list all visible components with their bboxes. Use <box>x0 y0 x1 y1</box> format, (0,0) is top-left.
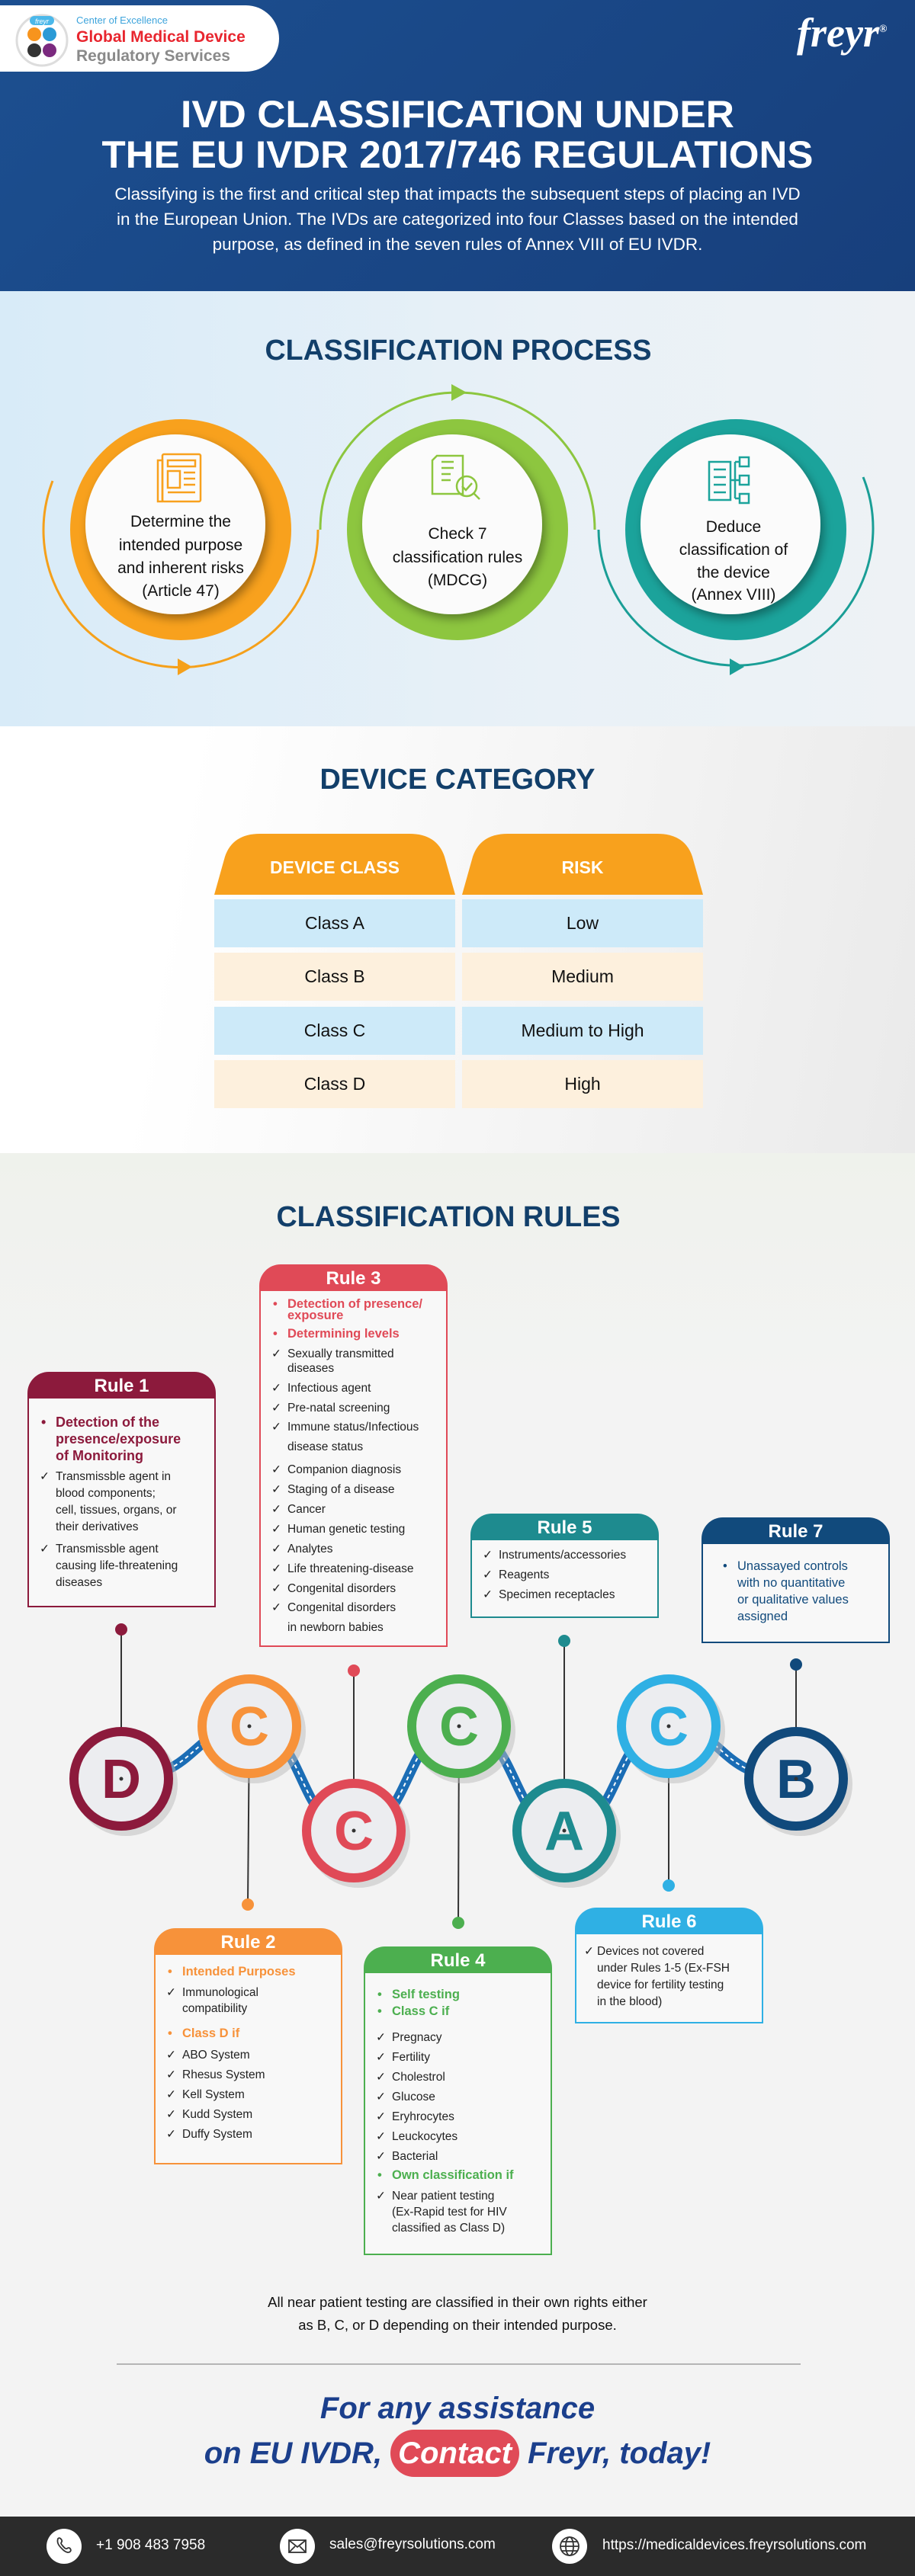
rule 7 box: or qualitative values <box>737 1593 849 1607</box>
rule 7 box: with no quantitative <box>737 1576 845 1590</box>
step 3 circle <box>625 419 846 640</box>
text: step 3: the device <box>697 564 770 582</box>
rule 2 box: Intended Purposes <box>182 1965 296 1978</box>
table: Class C <box>304 1020 365 1040</box>
icon: document check <box>432 456 480 499</box>
panel: device category <box>0 726 915 1153</box>
circle C red: C <box>334 1801 374 1862</box>
rule 5 box: Specimen receptacles <box>499 1588 615 1601</box>
logo emblem: freyr <box>35 18 50 25</box>
circle A: A <box>544 1801 584 1862</box>
text: step 1: and inherent risks <box>117 559 244 577</box>
circle B <box>749 1732 852 1836</box>
table rows: Class A <box>305 913 364 933</box>
heading: classification process: CLASSIFICATION PROCESS <box>265 335 651 367</box>
rule 4 box: Self testing <box>392 1988 460 2001</box>
table: Class D <box>304 1074 365 1094</box>
rule 4 box: Bacterial <box>392 2150 438 2163</box>
rule 3 box <box>259 1264 448 1647</box>
title <box>102 93 813 175</box>
rule 3 box: Human genetic testing <box>287 1523 405 1536</box>
rule 3 box: Congenital disorders <box>287 1601 396 1614</box>
rule 5 box: Instruments/accessories <box>499 1549 626 1562</box>
logo pill <box>0 5 279 72</box>
rule 2 box: ABO System <box>182 2049 250 2062</box>
table: High <box>564 1074 601 1094</box>
table: Low <box>567 913 599 933</box>
circle C blue: C <box>649 1697 689 1757</box>
rule 3 box: Analytes <box>287 1543 332 1556</box>
rule 1 box: Transmissble agent in <box>56 1470 171 1483</box>
arrow: teal arc <box>599 477 873 675</box>
table rows <box>214 899 455 947</box>
call to action: For any assistance <box>320 2392 595 2425</box>
text: step 2: (MDCG) <box>428 572 487 589</box>
circle C orange <box>202 1679 306 1783</box>
rule 2 box: Rule 2 <box>220 1932 276 1953</box>
rule 1 box: of Monitoring <box>56 1448 143 1463</box>
circle C green: C <box>439 1697 479 1757</box>
panel: classification rules <box>0 1153 915 2517</box>
rule 3 box: diseases <box>287 1362 334 1375</box>
rule 1 box <box>27 1372 216 1607</box>
table header tabs: RISK <box>562 857 604 877</box>
rule 2 box: Kell System <box>182 2088 245 2101</box>
rule 2 box: Immunological <box>182 1986 258 1999</box>
title: IVD CLASSIFICATION UNDER <box>181 93 734 136</box>
rule 3 box: Congenital disorders <box>287 1582 396 1595</box>
header banner <box>0 0 915 291</box>
rule 3 box: exposure <box>287 1309 343 1322</box>
panel: classification process <box>0 291 915 726</box>
table <box>214 834 703 1108</box>
rule 6 box <box>575 1908 763 2023</box>
rule 3 box: Detection of presence/ <box>287 1297 422 1311</box>
logo emblem <box>15 14 69 67</box>
chain diagram <box>69 1623 852 1929</box>
rule 6 box: Devices not covered <box>597 1945 704 1958</box>
rule 3 box: Immune status/Infectious <box>287 1421 419 1434</box>
rule 4 box: (Ex-Rapid test for HIV <box>392 2206 507 2219</box>
rule 1 box: causing life-threatening <box>56 1559 178 1572</box>
title: THE EU IVDR 2017/746 REGULATIONS <box>102 133 813 175</box>
rule 3 box: Pre-natal screening <box>287 1402 390 1415</box>
rule 3 box: Sexually transmitted <box>287 1347 394 1360</box>
table: Medium to High <box>521 1020 644 1040</box>
rule 7 box <box>702 1517 890 1643</box>
rule 3 box: Rule 3 <box>326 1268 381 1289</box>
logo text <box>76 14 246 65</box>
rule 4 box: Pregnacy <box>392 2031 441 2044</box>
text: step 3: classification of <box>679 541 788 559</box>
text: step 2: Check 7 <box>428 525 487 543</box>
call to action <box>204 2392 711 2477</box>
circle C green <box>412 1679 515 1783</box>
rule 3 box: Companion diagnosis <box>287 1463 401 1476</box>
rule 1 box: presence/exposure <box>56 1431 181 1447</box>
rule 4 box: Class C if <box>392 2004 449 2018</box>
rule 4 box: Own classification if <box>392 2168 514 2182</box>
rule 5 box: Reagents <box>499 1568 549 1581</box>
rule 4 box: Rule 4 <box>430 1950 486 1971</box>
rule 5 box <box>470 1514 659 1618</box>
rule 3 box: Cancer <box>287 1503 326 1516</box>
rule 3 box: in newborn babies <box>287 1621 384 1634</box>
icon: newspaper <box>158 454 201 501</box>
rule 4 box <box>364 1946 552 2255</box>
logo text: Center of Excellence <box>76 14 168 26</box>
step 1 circle <box>70 419 291 640</box>
rule 4 box: Fertility <box>392 2051 430 2064</box>
connector lines <box>121 1629 796 1923</box>
text: step 3: Deduce <box>706 518 761 536</box>
text: step 3: (Annex VIII) <box>692 586 775 604</box>
footnote: All near patient testing are classified in their own rights either <box>268 2294 647 2310</box>
rule 6 box: under Rules 1-5 (Ex-FSH <box>597 1962 730 1975</box>
rule 1 box: diseases <box>56 1576 102 1589</box>
rule 4 box: Near patient testing <box>392 2190 494 2203</box>
footnote <box>268 2294 647 2333</box>
text: step 1: intended purpose <box>119 537 242 554</box>
intro paragraph: Classifying is the first and critical step that impacts the subsequent steps of placing an IVD <box>114 184 801 203</box>
rule 4 box: classified as Class D) <box>392 2222 505 2235</box>
road path <box>121 1726 796 1831</box>
rule 4 box: Eryhrocytes <box>392 2110 454 2123</box>
logo text: Regulatory Services <box>76 47 230 65</box>
rule 7 box: assigned <box>737 1610 788 1623</box>
arrow: orange arc <box>43 481 318 675</box>
footer contact bar <box>0 2517 915 2576</box>
rule 6 box: Rule 6 <box>641 1911 697 1932</box>
pin dots <box>115 1623 802 1929</box>
rule 6 box: in the blood) <box>597 1995 662 2008</box>
text: step 2: classification rules <box>393 549 522 566</box>
icon: globe <box>552 2529 587 2564</box>
heading: device category: DEVICE CATEGORY <box>320 764 595 796</box>
heading: classification rules: CLASSIFICATION RULES <box>276 1201 621 1233</box>
table header tabs: DEVICE CLASS <box>270 857 400 877</box>
text: step 1: (Article 47) <box>142 582 220 600</box>
rule 2 box: Class D if <box>182 2027 239 2040</box>
rule 2 box: Rhesus System <box>182 2068 265 2081</box>
intro paragraph: in the European Union. The IVDs are categorized into four Classes based on the intended <box>117 210 798 229</box>
rule 1 box: blood components; <box>56 1487 156 1500</box>
rule 4 box: Glucose <box>392 2091 435 2103</box>
rule 5 box: Rule 5 <box>537 1517 592 1538</box>
rule 3 box: Infectious agent <box>287 1382 371 1395</box>
circle A <box>517 1783 621 1888</box>
table: Medium <box>551 966 614 986</box>
text: step 1: Determine the <box>130 513 231 530</box>
circle B: B <box>776 1749 816 1810</box>
circle C blue <box>621 1679 725 1783</box>
icon: phone <box>47 2529 82 2564</box>
icon: email <box>280 2529 315 2564</box>
rule 2 box: Duffy System <box>182 2128 252 2141</box>
circle D <box>74 1732 178 1836</box>
intro paragraph <box>114 184 801 254</box>
rule 6 box: device for fertility testing <box>597 1978 724 1991</box>
rule 3 box: disease status <box>287 1440 363 1453</box>
text: phone: +1 908 483 7958 <box>96 2537 205 2553</box>
table header tabs <box>214 834 703 895</box>
rule 3 box: Life threatening-disease <box>287 1562 413 1575</box>
rule 4 box: Cholestrol <box>392 2071 445 2084</box>
rule 3 box: Determining levels <box>287 1327 400 1341</box>
circle D: D <box>101 1749 141 1810</box>
call to action: Contact <box>398 2437 512 2470</box>
text: website: https://medicaldevices.freyrsolutions.com <box>602 2537 866 2553</box>
freyr logo: freyr® <box>797 10 887 56</box>
circle C orange: C <box>230 1697 269 1757</box>
rule 3 box: Staging of a disease <box>287 1483 394 1496</box>
rule 2 box: Kudd System <box>182 2108 252 2121</box>
circle C red <box>307 1783 410 1888</box>
rule 1 box: Detection of the <box>56 1415 159 1430</box>
rule 7 box: Unassayed controls <box>737 1559 848 1573</box>
footnote: as B, C, or D depending on their intended purpose. <box>298 2317 617 2333</box>
process diagram <box>43 384 874 675</box>
text: email: sales@freyrsolutions.com <box>329 2536 496 2552</box>
rule 2 box: compatibility <box>182 2002 247 2015</box>
table: Class B <box>304 966 365 986</box>
logo text: Global Medical Device <box>76 28 246 46</box>
rule 7 box: Rule 7 <box>768 1521 824 1542</box>
icon: hierarchy document <box>709 457 749 503</box>
arrow: green arc <box>320 384 595 530</box>
rule 1 box: their derivatives <box>56 1520 139 1533</box>
step 2 circle <box>347 419 568 640</box>
rule 2 box <box>154 1928 342 2164</box>
rule 1 box: cell, tissues, organs, or <box>56 1504 177 1517</box>
rule 1 box: Rule 1 <box>94 1376 149 1396</box>
call to action: on EU IVDR, Freyr, today! <box>204 2437 711 2470</box>
rule 4 box: Leuckocytes <box>392 2130 458 2143</box>
rule 1 box: Transmissble agent <box>56 1543 159 1556</box>
intro paragraph: purpose, as defined in the seven rules of Annex VIII of EU IVDR. <box>213 235 702 254</box>
